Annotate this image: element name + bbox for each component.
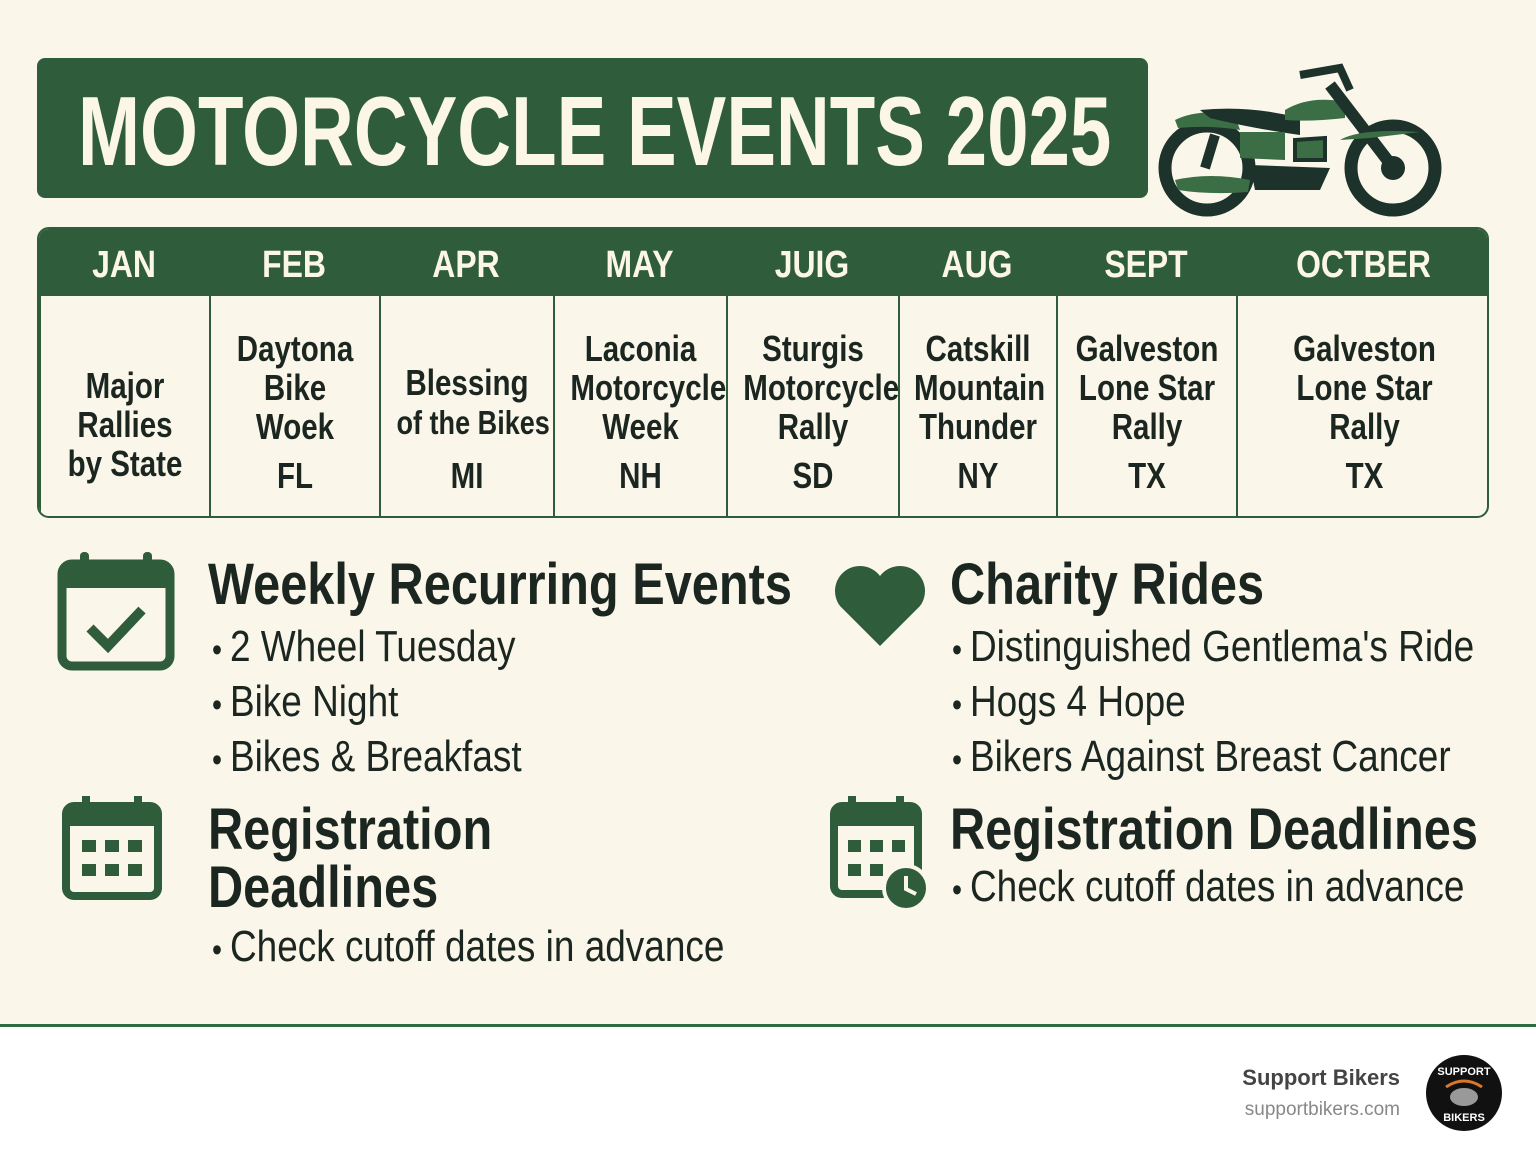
logo: BIKERS	[1443, 1112, 1485, 1124]
column: FEB: FL	[277, 455, 313, 496]
column: AUG: Mountain	[914, 367, 1045, 408]
column: AUG: NY	[957, 455, 998, 496]
list: weekly events: Bike Night	[230, 677, 398, 726]
column: JAN: Rallies	[77, 404, 173, 445]
column: AUG: AUG	[942, 244, 1012, 286]
icon: calendar clock	[830, 796, 926, 908]
column: MAY: Laconia	[585, 328, 696, 369]
column: APR	[379, 244, 550, 516]
heading: registration deadlines left: Deadlines	[208, 855, 438, 920]
column: MAY: NH	[619, 455, 662, 496]
list: weekly events: Bikes & Breakfast	[230, 732, 522, 781]
column: MAY: MAY	[605, 244, 674, 286]
icon: calendar grid	[62, 796, 162, 900]
list: registration right: Check cutoff dates in advance	[970, 862, 1464, 911]
column: FEB: FEB	[262, 244, 326, 286]
heading: registration deadlines right: Registration Deadlines	[950, 797, 1478, 862]
heading: registration deadlines left	[208, 797, 492, 920]
heading: registration deadlines left: Registration	[208, 797, 492, 862]
column: AUG: Catskill	[925, 328, 1031, 369]
column: AUG	[898, 244, 1045, 516]
footer brand text: supportbikers.com	[1245, 1099, 1400, 1120]
column: FEB: Bike	[264, 367, 326, 408]
column: SEPT: TX	[1128, 455, 1166, 496]
column: SEPT: Lone Star	[1079, 367, 1215, 408]
column: JAN: JAN	[92, 244, 156, 286]
title: MOTORCYCLE EVENTS 2025	[78, 76, 1111, 186]
column: OCTBER: TX	[1346, 455, 1383, 496]
logo: SUPPORT	[1437, 1066, 1491, 1078]
heading: charity rides: Charity Rides	[950, 552, 1264, 617]
column: APR: Blessing	[405, 362, 529, 403]
column: MAY: Motorcycle	[570, 367, 726, 408]
column: OCTBER: Lone Star	[1296, 367, 1433, 408]
footer brand text	[1242, 1065, 1400, 1120]
list: charity rides: Distinguished Gentlema's Ride	[970, 622, 1474, 671]
column: OCTBER: OCTBER	[1296, 244, 1431, 286]
column: SEPT	[1056, 244, 1218, 516]
icon: calendar check	[58, 552, 174, 670]
column: JUIG: JUIG	[775, 244, 849, 286]
column: AUG: Thunder	[919, 406, 1037, 447]
icon: motorcycle	[1158, 64, 1442, 216]
column: APR: APR	[432, 244, 500, 286]
column: JAN: Major	[86, 365, 164, 406]
column: JAN: by State	[68, 443, 182, 484]
column: FEB: Daytona	[237, 328, 353, 369]
column: SEPT: Rally	[1112, 406, 1182, 447]
icon: heart	[835, 566, 925, 646]
column: APR: MI	[451, 455, 483, 496]
column: JUIG: Rally	[778, 406, 848, 447]
column: MAY	[553, 244, 726, 516]
footer	[0, 1024, 1536, 1154]
column: JAN	[39, 244, 182, 512]
column: JUIG: Sturgis	[762, 328, 864, 369]
column: OCTBER: Galveston	[1293, 328, 1436, 369]
column: JUIG: SD	[792, 455, 834, 496]
footer brand text: Support Bikers	[1242, 1065, 1400, 1090]
list: weekly events	[213, 622, 522, 781]
column: MAY: Week	[602, 406, 679, 447]
table: events by month	[37, 227, 1489, 518]
heading: weekly recurring events: Weekly Recurring Events	[208, 552, 792, 617]
column: JUIG	[726, 244, 899, 516]
column: JUIG: Motorcycle	[743, 367, 899, 408]
column: OCTBER: Rally	[1329, 406, 1400, 447]
list: charity rides: Hogs 4 Hope	[970, 677, 1186, 726]
column: OCTBER	[1236, 244, 1436, 516]
column: APR: of the Bikes	[396, 404, 550, 441]
column: FEB	[209, 244, 354, 516]
column: SEPT: Galveston	[1076, 328, 1218, 369]
list: registration left: Check cutoff dates in advance	[230, 922, 724, 971]
logo	[1426, 1055, 1502, 1131]
list: charity rides	[953, 622, 1474, 781]
list: charity rides: Bikers Against Breast Cancer	[970, 732, 1451, 781]
list: weekly events: 2 Wheel Tuesday	[230, 622, 516, 671]
column: FEB: Woek	[256, 406, 334, 447]
column: SEPT: SEPT	[1104, 244, 1188, 286]
